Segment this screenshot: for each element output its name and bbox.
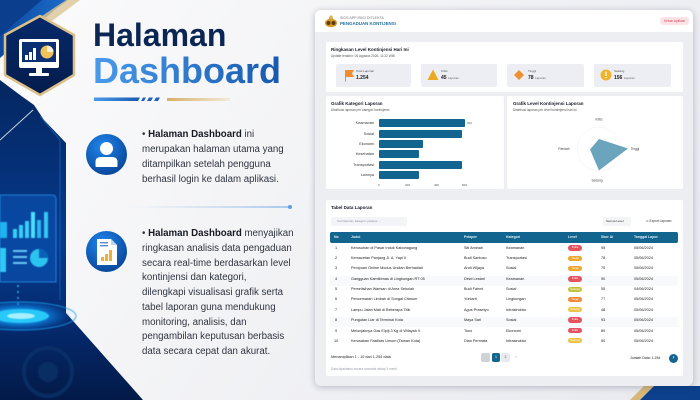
panel: category bar chart [326, 96, 504, 189]
table rows: Ekonomi [506, 329, 521, 333]
table rows: 2 [335, 256, 337, 260]
table rows: Tinggi [571, 256, 579, 260]
title: Dashboard [93, 50, 281, 91]
table rows: 78 [601, 256, 605, 260]
logout button [660, 17, 689, 25]
table rows: 4 [335, 277, 337, 281]
stat: sedang: 156 Laporan [614, 74, 635, 80]
search box [331, 217, 407, 226]
table rows: 1 [335, 246, 337, 250]
table rows: 93 [601, 318, 605, 322]
table rows: 05/06/2024 [634, 256, 653, 260]
panel: category bar chart: Grafik Kategori Laporan [331, 101, 383, 106]
level filter [603, 217, 631, 226]
panel: level radar chart: Grafik Level Kontinjensi Laporan [513, 101, 584, 106]
text block: details: pengambilan keputusan berbasis [142, 331, 284, 342]
table rows: Sedang [570, 338, 580, 342]
text block: details: secara real-time berdasarkan level [142, 258, 291, 268]
table rows: 89 [601, 329, 605, 333]
table header: Skor AI [601, 235, 613, 239]
table rows: 6 [335, 297, 337, 301]
stat: tinggi: Tinggi [528, 69, 536, 73]
table header: Kategori [506, 235, 520, 239]
table rows: 8 [335, 318, 337, 322]
panel: daily summary: Update terakhir: 05 Agustus 2026, 11:32 WIB [331, 54, 395, 58]
total count: Jumlah Data: 1.254 [630, 356, 660, 360]
table rows: Sosial [506, 318, 516, 322]
next button: › [672, 355, 674, 361]
title [93, 17, 281, 91]
text block: details: data secara cepat dan akurat. [142, 346, 270, 357]
table rows: Kritis [572, 317, 578, 321]
table rows: Transportasi [506, 256, 527, 260]
radar chart: Rendah [558, 147, 570, 151]
corner accent [630, 386, 700, 400]
table rows: 9 [335, 329, 337, 333]
text block: details: monitoring, analisis, dan [142, 316, 246, 328]
table footer: range text: Menampilkan 1 - 10 dari 1.254 data [331, 355, 391, 359]
table rows: Perselisihan Warisan di Area Sekolah [351, 287, 414, 291]
text block: details: dilengkapi visualisasi grafik serta [142, 287, 283, 298]
bar chart: Ekonomi [359, 142, 374, 146]
bar chart: 0 [378, 183, 380, 187]
app header: SIGS APP IRIGI DITLEKTA [340, 16, 384, 20]
panel: daily summary: Ringkasan Level Kontinjensi Hari Ini [331, 47, 409, 52]
icon: user [86, 134, 127, 175]
table rows: Lingkungan [506, 297, 526, 301]
panel: report table [326, 200, 683, 376]
table rows: Kerusuhan di Pasar Induk Kabonagung [351, 246, 417, 250]
bar chart: 400 [434, 183, 439, 187]
icon: police emblem [325, 15, 337, 28]
table rows: Penipuan Online Modus Undian Berhadiah [351, 266, 423, 270]
stat: kritis: Kritis [441, 69, 448, 73]
table rows: Pencemaran Limbah di Sungai Citarum [351, 297, 417, 301]
panel: level radar chart: Distribusi laporan per level kontinjensi hari ini [513, 108, 577, 112]
table rows: Lampu Jalan Mati di Beberapa Titik [351, 308, 410, 312]
level filter: Semua Level [606, 219, 624, 223]
table rows: Sedang [570, 307, 580, 311]
title: Halaman [93, 17, 226, 53]
table rows: 05/06/2024 [634, 246, 653, 250]
table rows: Dewi Lestari [464, 277, 485, 281]
divider [138, 205, 292, 209]
radar chart [558, 118, 640, 182]
text block: intro: ditampilkan setelah pengguna [142, 159, 271, 170]
stat: sedang: Sedang [614, 69, 624, 73]
text block: details: • Halaman Dashboard menyajikan [142, 228, 293, 239]
table rows: Tono [464, 329, 472, 333]
stat: tinggi [507, 64, 584, 87]
table header: Tanggal Lapor [634, 235, 658, 239]
text block: intro [142, 129, 284, 185]
table rows: 05/06/2024 [634, 329, 653, 333]
app header [315, 10, 693, 32]
table rows: Sosial [506, 287, 516, 291]
radar chart: Tinggi [631, 147, 640, 151]
text block: details: kontinjensi dan kategori, [142, 272, 246, 283]
table header: Pelapor [464, 235, 477, 239]
panel: daily summary [326, 42, 683, 92]
table rows: 05/06/2024 [634, 308, 653, 312]
title underline [94, 98, 230, 101]
table rows: 7 [335, 308, 337, 312]
table footer: note: Data diperbarui secara otomatis setiap 5 menit [331, 367, 397, 371]
table rows [334, 245, 653, 343]
table rows: Sosial [506, 266, 516, 270]
stat: kritis [421, 64, 497, 87]
table rows: Infrastruktur [506, 308, 526, 312]
table rows: 10 [334, 339, 338, 343]
panel: dashboard screenshot [315, 10, 693, 386]
bar chart: Sosial [364, 132, 374, 136]
table rows: Maya Sari [464, 318, 481, 322]
text block: intro: berhasil login ke dalam aplikasi. [142, 174, 279, 185]
icon: report document [86, 231, 127, 272]
table rows: 05/06/2024 [634, 318, 653, 322]
table header [330, 232, 678, 243]
table rows: Gangguan Kamtibmas di Lingkungan RT 05 [351, 277, 425, 281]
search box: Cari laporan, kategori, pelapor... [337, 219, 380, 223]
table header: Level [568, 235, 577, 239]
bar chart: Transportasi [353, 163, 374, 167]
text block: details: tabel laporan guna mendukung [142, 302, 276, 313]
text block: intro: merupakan halaman utama yang [142, 144, 284, 155]
table rows: Kritis [572, 245, 578, 249]
bar chart: Kesehatan [356, 152, 374, 156]
dashboard hologram [0, 195, 76, 396]
table rows: 04/06/2024 [634, 287, 653, 291]
bar chart: 200 [405, 183, 410, 187]
table rows: Kerusakan Fasilitas Umum (Taman Kota) [351, 339, 420, 343]
table rows: 3 [335, 266, 337, 270]
radar chart: Kritis [595, 118, 603, 122]
bar chart: 600 [467, 121, 472, 125]
logout button: Keluar Aplikasi [664, 19, 685, 23]
table rows: 77 [601, 297, 605, 301]
radar chart: Sedang [592, 178, 603, 182]
table rows: Yuniarti [464, 297, 477, 301]
pagination: 2 [505, 355, 506, 359]
left decorative background [0, 0, 143, 400]
table rows: Kritis [572, 328, 578, 332]
panel: report table: Tabel Data Laporan [331, 205, 372, 210]
next button [669, 354, 678, 363]
table rows: Pungutan Liar di Terminal Kota [351, 318, 403, 322]
table rows: Keamanan [506, 277, 524, 281]
stat: kritis: 45 Laporan [441, 74, 459, 80]
table rows: 55 [601, 287, 605, 291]
table header: No [334, 235, 339, 239]
bar chart [353, 119, 472, 187]
table rows: Keamanan [506, 246, 524, 250]
pagination: › [515, 355, 517, 359]
table rows: 90 [601, 277, 605, 281]
table rows: Sedang [570, 286, 580, 290]
table rows: Tinggi [571, 266, 579, 270]
stat: total laporan: 1.254 [356, 74, 369, 80]
table rows: 05/06/2024 [634, 277, 653, 281]
stat: tinggi: 78 Laporan [528, 74, 546, 80]
table rows: Kritis [572, 276, 578, 280]
table rows: Agus Prasetyo [464, 308, 489, 312]
table rows: 50 [601, 339, 605, 343]
table rows: Kemacetan Panjang Jl. A. Yapi II [351, 256, 406, 260]
stat: total laporan [336, 64, 411, 87]
table rows: Budi Santoso [464, 256, 487, 260]
hex badge icon [5, 16, 74, 95]
table header: Judul [351, 235, 360, 239]
table rows: Siti Aminah [464, 246, 483, 250]
bar chart: 600 [462, 183, 467, 187]
bar chart: Lainnya [361, 173, 374, 177]
text block: details [142, 228, 293, 357]
table rows: Melonjaknya Gas Elpiji 3 Kg di Wilayah X [351, 329, 420, 333]
table rows: 95 [601, 246, 605, 250]
table rows: 48 [601, 308, 605, 312]
table rows: 05/06/2024 [634, 266, 653, 270]
text block: details: ringkasan analisis data pengaduan [142, 243, 292, 254]
stat: total laporan: Total Laporan [356, 69, 374, 73]
table rows: Dian Permata [464, 339, 487, 343]
table rows: 5 [335, 287, 337, 291]
bar chart: Keamanan [356, 121, 374, 125]
pagination [481, 353, 517, 362]
panel: level radar chart [507, 96, 683, 189]
app header: PENGADUAN KONTIJENSI [340, 20, 396, 26]
panel: category bar chart: Distribusi laporan per kategori kontinjensi [331, 108, 389, 112]
pagination: 1 [495, 355, 497, 359]
table rows: Tinggi [571, 297, 579, 301]
table rows: 75 [601, 266, 605, 270]
export link: ⊙ Export Laporan [646, 219, 671, 223]
table rows: Budi Fahmi [464, 287, 483, 291]
text block: intro: • Halaman Dashboard ini [142, 129, 254, 140]
table rows: Infrastruktur [506, 339, 526, 343]
table rows: 05/06/2024 [634, 297, 653, 301]
table rows: Andi Wijaya [464, 266, 484, 270]
stat: sedang [594, 64, 671, 87]
table rows: 05/06/2024 [634, 339, 653, 343]
